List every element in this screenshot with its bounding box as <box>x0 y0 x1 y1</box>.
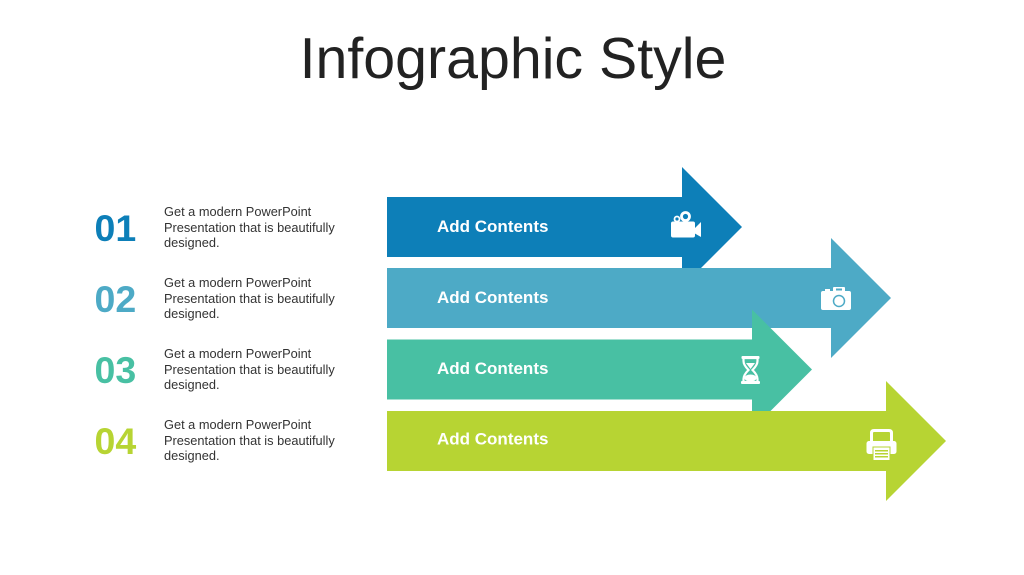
icon: camera <box>821 287 851 310</box>
number 02: 02 <box>94 278 136 320</box>
text block 01 <box>164 204 335 250</box>
text block 03: Get a modern PowerPoint <box>164 346 311 361</box>
arrow 3 <box>387 310 812 430</box>
text block 02: Get a modern PowerPoint <box>164 275 311 290</box>
text block 03 <box>164 346 335 392</box>
text block 02 <box>164 275 335 321</box>
text block 04 <box>164 417 335 463</box>
text block 03: designed. <box>164 377 220 392</box>
text block 02: Presentation that is beautifully <box>164 291 335 306</box>
text block 04: Get a modern PowerPoint <box>164 417 311 432</box>
icon: video camera <box>671 212 701 238</box>
icon: printer <box>866 430 896 460</box>
number 01: 01 <box>94 207 136 249</box>
arrow 4: Add Contents <box>437 430 548 448</box>
text block 02: designed. <box>164 306 220 321</box>
arrow 4 <box>387 381 946 501</box>
text block 01: designed. <box>164 235 220 250</box>
title: Infographic Style <box>300 27 726 91</box>
arrow 3: Add Contents <box>437 359 548 378</box>
text block 01: Get a modern PowerPoint <box>164 204 311 219</box>
text block 04: designed. <box>164 448 220 463</box>
arrow 2 <box>387 238 891 358</box>
arrow 1 <box>387 167 742 287</box>
text block 01: Presentation that is beautifully <box>164 220 335 235</box>
number 03: 03 <box>94 348 136 390</box>
arrow 1: Add Contents <box>437 217 548 236</box>
text block 04: Presentation that is beautifully <box>164 433 335 448</box>
text block 03: Presentation that is beautifully <box>164 362 335 377</box>
number 04: 04 <box>94 420 136 462</box>
icon: hourglass <box>741 356 760 384</box>
arrow 2: Add Contents <box>437 288 548 307</box>
